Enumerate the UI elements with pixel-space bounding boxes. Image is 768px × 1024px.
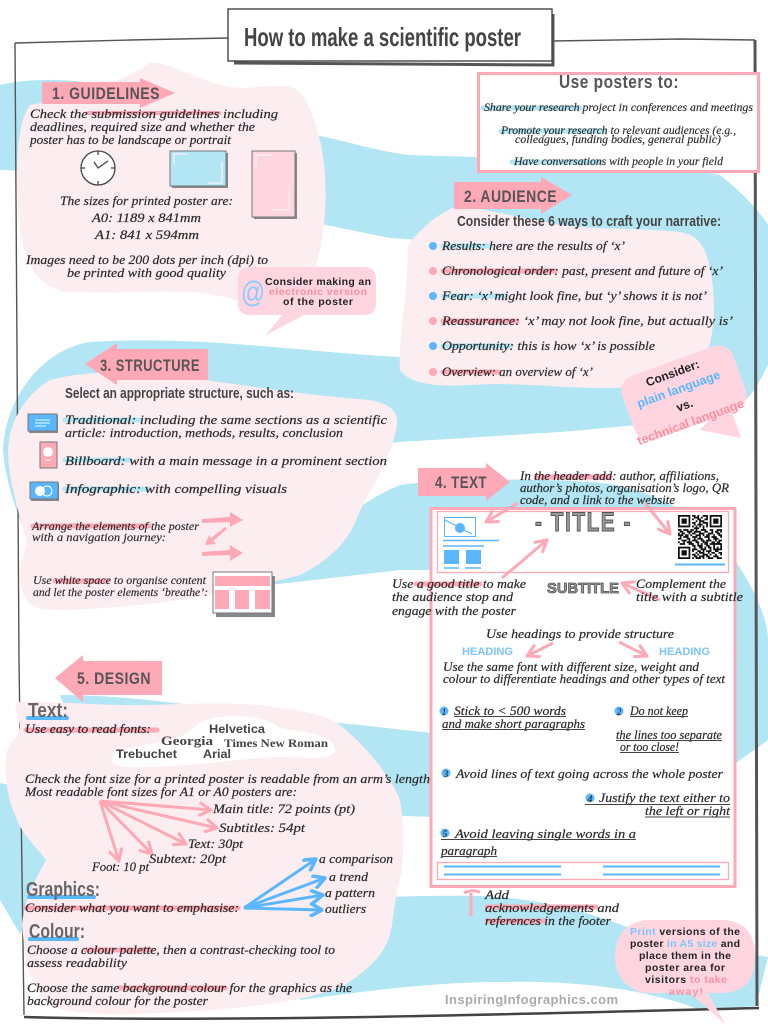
subheading: text: Text: — [28, 700, 68, 722]
heading sample right: HEADING — [659, 646, 710, 658]
text: traditional: article: introduction, methods, results, conclusion — [65, 425, 343, 440]
arrow: to footer — [464, 891, 480, 916]
panel: use posters to: Use posters to: — [559, 72, 679, 92]
heading: 2. audience — [454, 177, 572, 214]
callout: plain language: plain language — [635, 368, 722, 411]
labels: font sizes: Foot: 10 pt — [91, 859, 149, 874]
heading: 5. design — [55, 655, 162, 702]
printed sizes: The sizes for printed poster are: — [60, 193, 233, 208]
heading: 1. guidelines — [42, 78, 175, 108]
panel: structure — [8, 343, 397, 617]
icon: QR code — [678, 515, 722, 559]
arrows: navigation journey — [202, 512, 243, 561]
font samples: Helvetica — [209, 722, 265, 736]
text: traditional — [65, 412, 387, 440]
text: header advice: author’s photos, organisation’s logo, QR — [520, 480, 729, 495]
list: six narratives: Overview: an overview of ‘x’ — [442, 364, 593, 379]
text: navigation journey: Arrange the elements of the poster — [31, 521, 200, 533]
text: colour advice: assess readability — [27, 955, 127, 970]
tip 4 — [585, 790, 731, 818]
labels: font sizes: Subtext: 20pt — [149, 851, 226, 866]
guidelines text: poster has to be landscape or portrait — [29, 132, 231, 147]
heading: 4. text: 4. TEXT — [435, 473, 487, 492]
text: white space: and let the poster elements ‘breathe’: — [33, 587, 208, 599]
text: infographic: Infographic: with compelling visuals — [64, 481, 287, 496]
labels: font sizes: Subtitles: 54pt — [219, 820, 305, 835]
callout: plain language: Consider: — [644, 357, 701, 389]
text: header advice: In the header add: author, affiliations, — [519, 468, 719, 483]
arrow: to title — [502, 540, 547, 578]
text: colour advice: Choose a colour palette, then a contrast-checking tool to — [27, 942, 336, 957]
labels: font sizes — [91, 801, 355, 874]
panel: audience — [400, 177, 733, 388]
panel: use posters to: Have conversations with people in your field — [513, 156, 723, 168]
example poster — [431, 507, 735, 886]
text: good title: the audience stop and — [392, 589, 514, 604]
font samples — [112, 716, 335, 767]
arrow: to subtitle — [622, 583, 660, 600]
icon: white space layout — [213, 572, 275, 617]
text: header advice — [519, 468, 729, 507]
heading: 5. design: 5. DESIGN — [77, 669, 151, 688]
icon: traditional — [28, 414, 58, 433]
tip 4: the left or right — [645, 803, 730, 818]
guidelines text — [29, 106, 279, 147]
text: navigation journey — [31, 521, 200, 544]
tip 4: Justify the text either to — [599, 790, 731, 805]
callout: print A5 versions: away! — [669, 986, 703, 998]
heading: 3. structure — [85, 343, 208, 385]
list: six narratives: Opportunity: this is how ‘x’ is possible — [442, 338, 655, 353]
text: traditional: Traditional: including the same sections as a scientific — [65, 412, 387, 427]
list: six narratives: Chronological order: past, present and future of ‘x’ — [442, 263, 723, 278]
callout: print A5 versions: place them in the — [639, 950, 731, 962]
text: font sizes: Most readable font sizes for A1 or A0 posters are: — [24, 784, 297, 799]
panel: text — [392, 463, 743, 928]
labels: emphasis — [319, 851, 393, 916]
printed sizes: A0: 1189 x 841mm — [91, 210, 201, 225]
image resolution note: be printed with good quality — [67, 265, 226, 280]
icon: portrait poster — [252, 151, 297, 219]
image resolution note — [25, 252, 269, 280]
labels: font sizes: Text: 30pt — [188, 836, 243, 851]
text: colour advice: background colour for the poster — [27, 993, 209, 1008]
text: colour advice — [27, 942, 352, 1008]
tip 3: 3 — [443, 769, 449, 779]
printed sizes — [60, 193, 233, 242]
arrows: font sizes — [100, 801, 217, 861]
callout: plain language: vs. — [674, 396, 695, 415]
poster header — [438, 507, 728, 572]
text: footer advice: references in the footer — [485, 913, 612, 928]
QR underline — [675, 564, 725, 566]
text: footer advice: Add — [484, 887, 510, 902]
text: white space — [33, 575, 208, 599]
callout: print A5 versions: Print versions of the — [630, 926, 740, 938]
icon: landscape poster — [170, 151, 228, 188]
heading sample left: HEADING — [462, 646, 513, 658]
text: complement subtitle: title with a subtitle — [636, 589, 743, 604]
text: header advice: code, and a link to the website — [520, 492, 675, 507]
font samples: Trebuchet — [116, 747, 177, 761]
heading: 1. guidelines: 1. GUIDELINES — [52, 84, 160, 103]
text: font sizes: Check the font size for a printed poster is readable from an arm’s length — [25, 771, 430, 786]
text: complement subtitle — [636, 576, 743, 604]
structure intro: Select an appropriate structure, such as: — [65, 385, 294, 402]
panel: design — [6, 655, 430, 1014]
text: navigation journey: with a navigation journey: — [32, 532, 166, 544]
callout: print A5 versions: poster area for — [645, 962, 725, 974]
text: billboard: Billboard: with a main message in a prominent section — [65, 453, 387, 468]
text: good title: Use a good title to make — [392, 576, 526, 591]
tip 2: or too close! — [620, 739, 679, 754]
icon: clock — [81, 151, 115, 185]
list: six narratives: Reassurance: ‘x’ may not look fine, but actually is’ — [441, 313, 733, 328]
heading: 2. audience: 2. AUDIENCE — [464, 187, 557, 206]
tip 2: 2 — [617, 707, 622, 717]
heading: 3. structure: 3. STRUCTURE — [100, 356, 200, 375]
text: emphasise: Consider what you want to emphasise: — [25, 900, 239, 915]
font samples: Times New Roman — [224, 736, 328, 750]
tip 5: paragraph — [440, 843, 497, 858]
tip 3: Avoid lines of text going across the whole poster — [455, 766, 724, 781]
labels: emphasis: a trend — [329, 869, 369, 884]
text: good title — [392, 576, 526, 618]
tip 1: and make short paragraphs — [442, 716, 585, 731]
tip 5: 5 — [443, 829, 448, 839]
text: same font: Use the same font with different size, weight and — [443, 659, 699, 674]
callout: print A5 versions: poster in A5 size and — [630, 938, 740, 950]
arrows: headings — [527, 642, 647, 656]
callout: electronic version: electronic version — [269, 286, 367, 298]
tip 2: Do not keep — [629, 703, 688, 718]
callout: print A5 versions: visitors to take — [645, 974, 727, 986]
heading: 4. text — [418, 463, 510, 501]
icon: infographic — [30, 482, 59, 501]
list: six narratives — [429, 238, 733, 379]
header logo and lines — [443, 518, 499, 568]
tip 1: 1 — [442, 707, 446, 717]
title: How to make a scientific poster — [244, 22, 521, 52]
title — [228, 9, 553, 65]
callout: electronic version: @ — [241, 276, 265, 309]
panel: use posters to — [478, 72, 758, 172]
image resolution note: Images need to be 200 dots per inch (dpi) to — [25, 252, 269, 267]
font samples: Georgia — [161, 733, 214, 748]
printed sizes: A1: 841 x 594mm — [94, 227, 199, 242]
text: same font — [443, 659, 725, 686]
callout: electronic version — [238, 267, 376, 335]
tip 5 — [440, 826, 637, 858]
text: footer advice: acknowledgements and — [485, 900, 620, 915]
text: same font: colour to differentiate headings and other types of text — [443, 671, 725, 686]
tip 5: Avoid leaving single words in a — [454, 826, 637, 841]
guidelines text: deadlines, required size and whether the — [30, 119, 255, 134]
panel: use posters to: colleagues, funding bodies, general public) — [515, 134, 721, 146]
list: six narratives: Results: here are the results of ‘x’ — [441, 238, 625, 253]
tip 2 — [614, 703, 722, 754]
tip 1: Stick to < 500 words — [454, 703, 566, 718]
panel: use posters to: Share your research project in conferences and meetings — [484, 102, 754, 114]
callout: electronic version: of the poster — [283, 296, 353, 308]
panel: use posters to: Promote your research to relevant audiences (e.g., — [500, 125, 736, 137]
callout: electronic version: Consider making an — [265, 276, 371, 288]
arrows: emphasis — [244, 859, 325, 910]
text: white space: Use white space to organise content — [33, 575, 207, 587]
icon: billboard — [40, 442, 57, 468]
labels: font sizes: Main title: 72 points (pt) — [212, 801, 355, 816]
tip 2: the lines too separate — [616, 727, 722, 742]
callout: print A5 versions — [615, 920, 755, 1024]
labels: emphasis: a pattern — [325, 885, 375, 900]
text: colour advice: Choose the same background colour for the graphics as the — [27, 980, 352, 995]
panel: guidelines — [17, 63, 326, 310]
subheading: graphics: Graphics: — [26, 879, 100, 901]
credit: InspiringInfographics.com — [445, 992, 618, 1007]
text: good title: engage with the poster — [392, 603, 517, 618]
tip 1 — [440, 703, 585, 731]
text: font sizes — [24, 771, 430, 799]
tip 4: 4 — [588, 794, 593, 804]
labels: emphasis: outliers — [325, 901, 366, 916]
list: six narratives: Fear: ‘x’ might look fine, but ‘y’ shows it is not’ — [441, 288, 707, 303]
subtitle: SUBTITLE — [547, 580, 619, 597]
callout: plain language: technical language — [635, 396, 746, 448]
font samples: Arial — [203, 747, 231, 761]
arrow: header left — [486, 503, 518, 522]
poster footer — [438, 862, 728, 880]
callout: plain language — [617, 341, 751, 448]
labels: emphasis: a comparison — [319, 851, 393, 866]
text: headings: Use headings to provide structure — [486, 626, 674, 641]
big title: - TITLE - — [535, 507, 632, 537]
text: complement subtitle: Complement the — [636, 576, 726, 591]
text: footer advice — [484, 887, 620, 928]
subheading: colour: Colour: — [29, 921, 85, 943]
arrow: header right — [645, 503, 670, 534]
text: easy fonts: Use easy to read fonts: — [25, 721, 151, 736]
guidelines text: Check the submission guidelines including — [30, 106, 279, 121]
